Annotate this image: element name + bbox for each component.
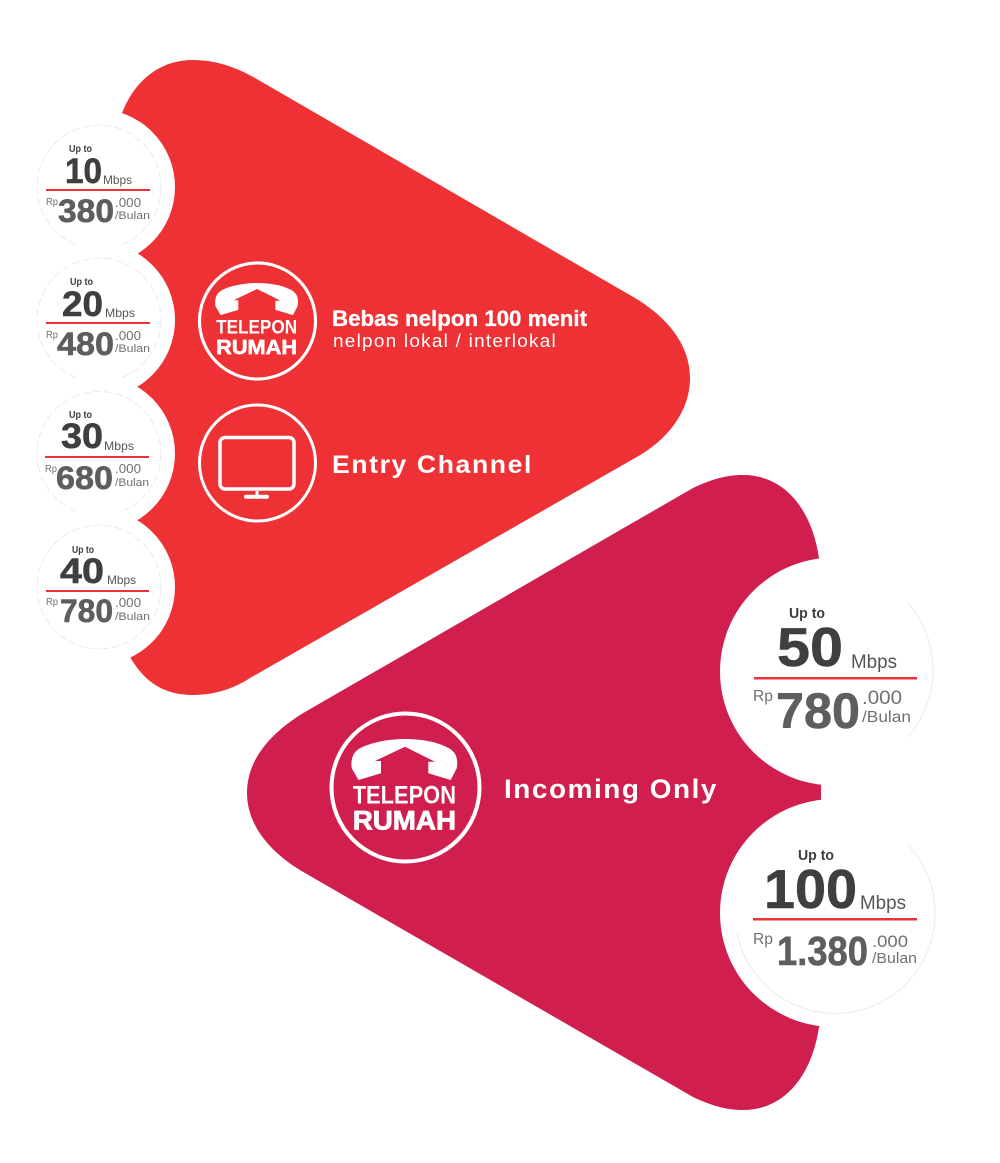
heading: Entry Channel: Entry Channel — [332, 451, 533, 479]
crimson play-shaped background — [247, 475, 821, 1110]
package: up to 100 Mbps: .000 — [872, 932, 908, 951]
package: up to 30 Mbps — [19, 376, 175, 532]
package: up to 100 Mbps — [720, 799, 948, 1027]
package: up to 30 Mbps: Mbps — [104, 439, 134, 453]
red play-shaped background — [122, 60, 690, 695]
package: up to 10 Mbps: .000 — [115, 195, 141, 210]
icon: telepon rumah logo: RUMAH — [353, 805, 456, 835]
package: up to 10 Mbps: 10 — [65, 152, 102, 191]
package: up to 10 Mbps — [19, 109, 175, 265]
package: up to 20 Mbps: 480 — [57, 326, 114, 362]
package: up to 40 Mbps: .000 — [115, 595, 141, 610]
panel: crimson incoming plan — [247, 475, 948, 1110]
package: up to 50 Mbps: 780 — [776, 683, 860, 739]
package: up to 10 Mbps: Rp — [46, 196, 58, 208]
package: up to 100 Mbps: Rp — [753, 931, 773, 948]
heading: Bebas nelpon 100 menit: Bebas nelpon 100 menit — [332, 306, 588, 331]
package: up to 20 Mbps: .000 — [115, 328, 141, 343]
package: up to 40 Mbps: 40 — [60, 552, 104, 591]
icon: television — [200, 405, 316, 521]
package: up to 50 Mbps: Mbps — [851, 652, 897, 673]
icon: telepon rumah logo: TELEPON — [216, 317, 297, 339]
package: up to 20 Mbps — [19, 242, 175, 398]
package: up to 30 Mbps: /Bulan — [115, 477, 149, 489]
package: up to 40 Mbps: Mbps — [107, 573, 136, 587]
package: up to 100 Mbps: 100 — [764, 858, 857, 920]
package: up to 50 Mbps: Up to — [789, 606, 825, 622]
heading: Incoming Only: Incoming Only — [504, 774, 718, 804]
package: up to 40 Mbps — [19, 509, 175, 665]
package: up to 50 Mbps: 50 — [777, 616, 843, 678]
package: up to 30 Mbps: 30 — [61, 417, 103, 456]
icon: telepon rumah logo: TELEPON — [353, 782, 456, 810]
package: up to 100 Mbps: 1.380 — [777, 928, 868, 974]
panel: red entry plan — [19, 60, 690, 695]
package: up to 20 Mbps: Rp — [46, 329, 58, 341]
package: up to 100 Mbps: /Bulan — [872, 950, 917, 967]
package: up to 40 Mbps: Rp — [46, 596, 58, 608]
package: up to 40 Mbps: Up to — [72, 545, 94, 556]
package: up to 10 Mbps: 380 — [58, 193, 114, 229]
package: up to 30 Mbps: Up to — [69, 410, 92, 421]
package: up to 20 Mbps: Up to — [70, 277, 93, 288]
icon: telepon rumah logo: RUMAH — [216, 336, 297, 359]
package: up to 50 Mbps: .000 — [862, 688, 902, 709]
package: up to 20 Mbps: /Bulan — [115, 343, 150, 355]
package: up to 20 Mbps: Mbps — [105, 306, 135, 320]
package: up to 50 Mbps — [720, 558, 948, 786]
icon: telepon rumah logo — [199, 263, 316, 379]
icon: telepon rumah logo — [332, 714, 480, 862]
package: up to 30 Mbps: 680 — [56, 460, 113, 496]
package: up to 10 Mbps: Up to — [69, 144, 92, 155]
package: up to 30 Mbps: .000 — [115, 461, 141, 476]
package: up to 50 Mbps: /Bulan — [862, 709, 911, 726]
package: up to 100 Mbps: Mbps — [860, 893, 906, 914]
package: up to 10 Mbps: /Bulan — [115, 210, 150, 222]
package: up to 20 Mbps: 20 — [62, 285, 103, 324]
package: up to 40 Mbps: 780 — [60, 593, 113, 629]
package: up to 10 Mbps: Mbps — [103, 173, 132, 187]
package: up to 100 Mbps: Up to — [798, 848, 834, 864]
package: up to 40 Mbps: /Bulan — [115, 611, 150, 623]
package: up to 50 Mbps: Rp — [753, 688, 773, 705]
text: nelpon lokal / interlokal: nelpon lokal / interlokal — [333, 331, 557, 351]
package: up to 30 Mbps: Rp — [45, 463, 57, 475]
